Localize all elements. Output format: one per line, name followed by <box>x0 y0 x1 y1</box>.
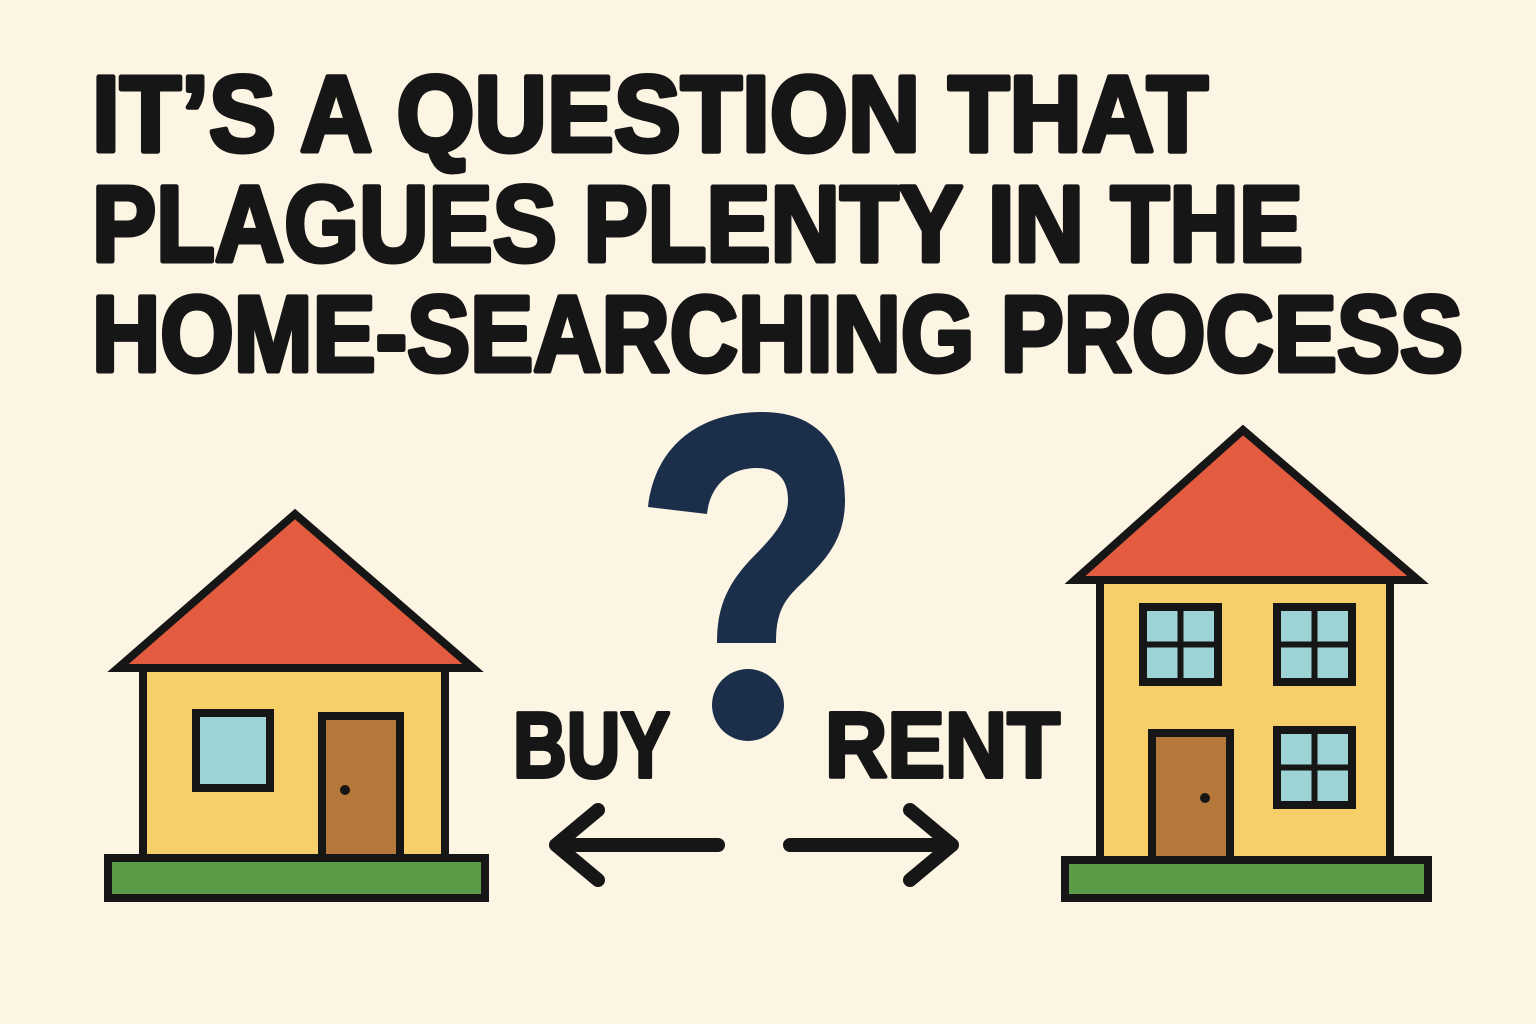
label: RENT: RENT <box>825 693 1060 797</box>
icon: two-storey house (rent) <box>1065 430 1428 898</box>
label: BUY: BUY <box>513 693 670 797</box>
title: IT’S A QUESTION THAT <box>92 53 1208 174</box>
title <box>92 53 1463 394</box>
icon: small house (buy) <box>108 514 485 898</box>
arrow: left <box>556 810 718 880</box>
arrow: right <box>790 810 952 880</box>
title: PLAGUES PLENTY IN THE <box>92 163 1303 284</box>
icon: question mark <box>648 412 845 741</box>
